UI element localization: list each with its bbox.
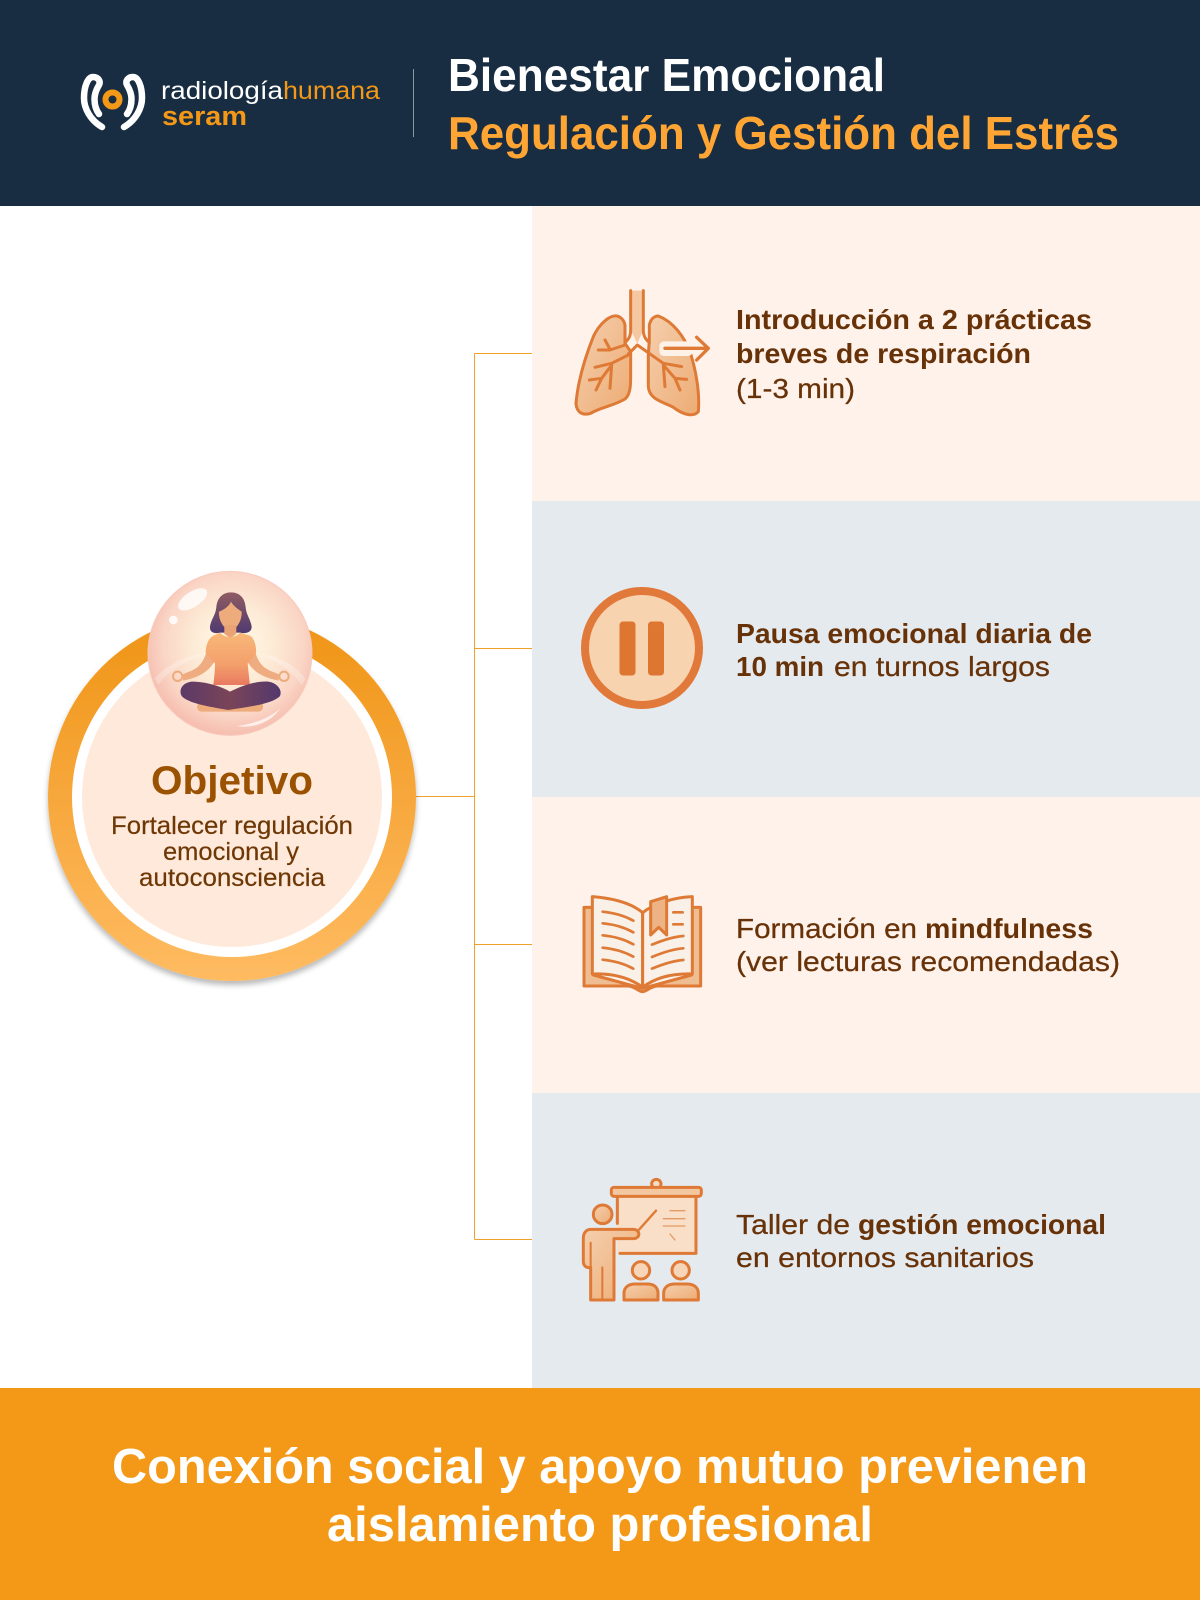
logo icon <box>84 77 142 127</box>
text: objective <box>111 812 353 892</box>
text: objective: emocional y <box>163 838 300 866</box>
text: pause <box>736 618 1092 682</box>
icon: open book <box>584 897 701 992</box>
title: Bienestar Emocional <box>448 49 885 101</box>
text: breathing: (1-3 min) <box>736 373 855 404</box>
title: Regulación y Gestión del Estrés <box>448 107 1119 159</box>
footer text: Conexión social y apoyo mutuo previenen <box>112 1440 1088 1494</box>
text: objective: autoconsciencia <box>139 864 325 892</box>
text: mindfulness: (ver lecturas recomendadas) <box>736 946 1120 977</box>
text: breathing: breves de respiración <box>736 338 1031 369</box>
text: workshop: gestión emocional <box>858 1209 1106 1240</box>
logo wordmark: humana <box>283 77 380 105</box>
text: breathing: Introducción a 2 prácticas <box>736 304 1092 335</box>
text: mindfulness: mindfulness <box>925 913 1093 944</box>
icon: lungs <box>576 291 708 415</box>
panel: pause <box>532 501 1200 797</box>
footer banner <box>0 1388 1200 1600</box>
text: objective: Fortalecer regulación <box>111 812 353 840</box>
connector lines <box>416 354 532 1240</box>
objective circle <box>48 571 416 981</box>
text: breathing <box>736 304 1092 404</box>
logo <box>84 77 380 131</box>
text: pause: Pausa emocional diaria de <box>736 618 1092 649</box>
title <box>448 49 1119 159</box>
text: workshop: Taller de <box>736 1209 850 1240</box>
panel: workshop <box>532 1093 1200 1388</box>
footer text: aislamiento profesional <box>327 1498 873 1552</box>
footer text <box>112 1440 1088 1552</box>
icon: pause <box>585 591 699 705</box>
text: mindfulness: Formación en <box>736 913 917 944</box>
panel: breathing <box>532 206 1200 501</box>
text: pause: en turnos largos <box>834 651 1050 682</box>
icon: teacher and audience <box>583 1179 701 1300</box>
text: workshop: en entornos sanitarios <box>736 1242 1034 1273</box>
logo wordmark <box>161 77 380 131</box>
text: workshop <box>736 1209 1106 1273</box>
heading: objetivo: Objetivo <box>151 759 313 803</box>
logo wordmark: seram <box>162 101 247 131</box>
panel: mindfulness <box>532 797 1200 1093</box>
header band <box>0 0 1200 206</box>
icon: meditating woman in bubble <box>148 571 312 735</box>
text: mindfulness <box>736 913 1120 977</box>
text: pause: 10 min <box>736 651 824 682</box>
logo wordmark: radiología <box>161 77 283 105</box>
